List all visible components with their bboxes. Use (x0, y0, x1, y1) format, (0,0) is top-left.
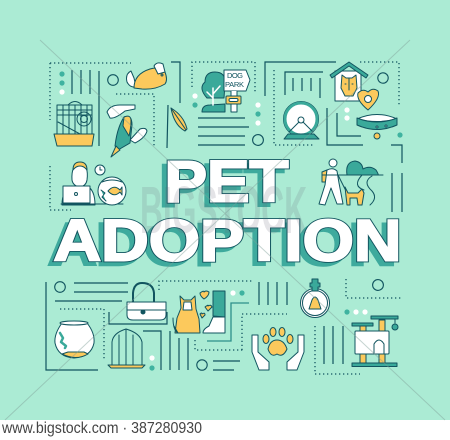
icon: pet carrier bag (127, 283, 166, 320)
icon: bird cage (108, 329, 145, 368)
sign label: PARK (225, 80, 244, 89)
title: PET (164, 150, 288, 214)
title shadow (48, 154, 396, 278)
icon: dog park sign and tree (202, 70, 250, 112)
icon: leg with sneaker (203, 291, 225, 333)
icon: sitting dog (173, 296, 200, 333)
icon: fish bowl with plant (55, 321, 94, 358)
sign label (225, 71, 244, 89)
sign label: DOG (227, 71, 243, 80)
footer credit: www.bigstock.com · 387280930 (1, 420, 202, 437)
icon: hamster wheel (284, 102, 319, 139)
icon: person walking dog (319, 159, 383, 205)
icon: hearts (200, 291, 212, 318)
title shadow: PET (160, 154, 284, 218)
icon: pet collar (357, 114, 397, 139)
decorative circuit lines and dots (46, 62, 403, 374)
icon: cat tree (352, 316, 398, 366)
icon: feather (171, 108, 187, 131)
icon: clock (95, 165, 105, 175)
icon: dog house with heart (330, 62, 379, 110)
icon: bell timer (300, 279, 330, 318)
title outline (54, 150, 402, 274)
title outline: ADOPTION (54, 208, 402, 274)
title: ADOPTION (54, 208, 402, 274)
icon: goldfish bowl (98, 177, 126, 205)
icon: man with laptop (61, 162, 123, 205)
title shadow: ADOPTION (48, 212, 396, 278)
icon: chinchilla (126, 63, 166, 89)
title outline: PET (164, 150, 288, 214)
icon: hamster cage (54, 102, 94, 146)
icon: parrot on hand (107, 105, 147, 157)
title (54, 150, 402, 274)
icon: paw in hands (252, 328, 304, 370)
